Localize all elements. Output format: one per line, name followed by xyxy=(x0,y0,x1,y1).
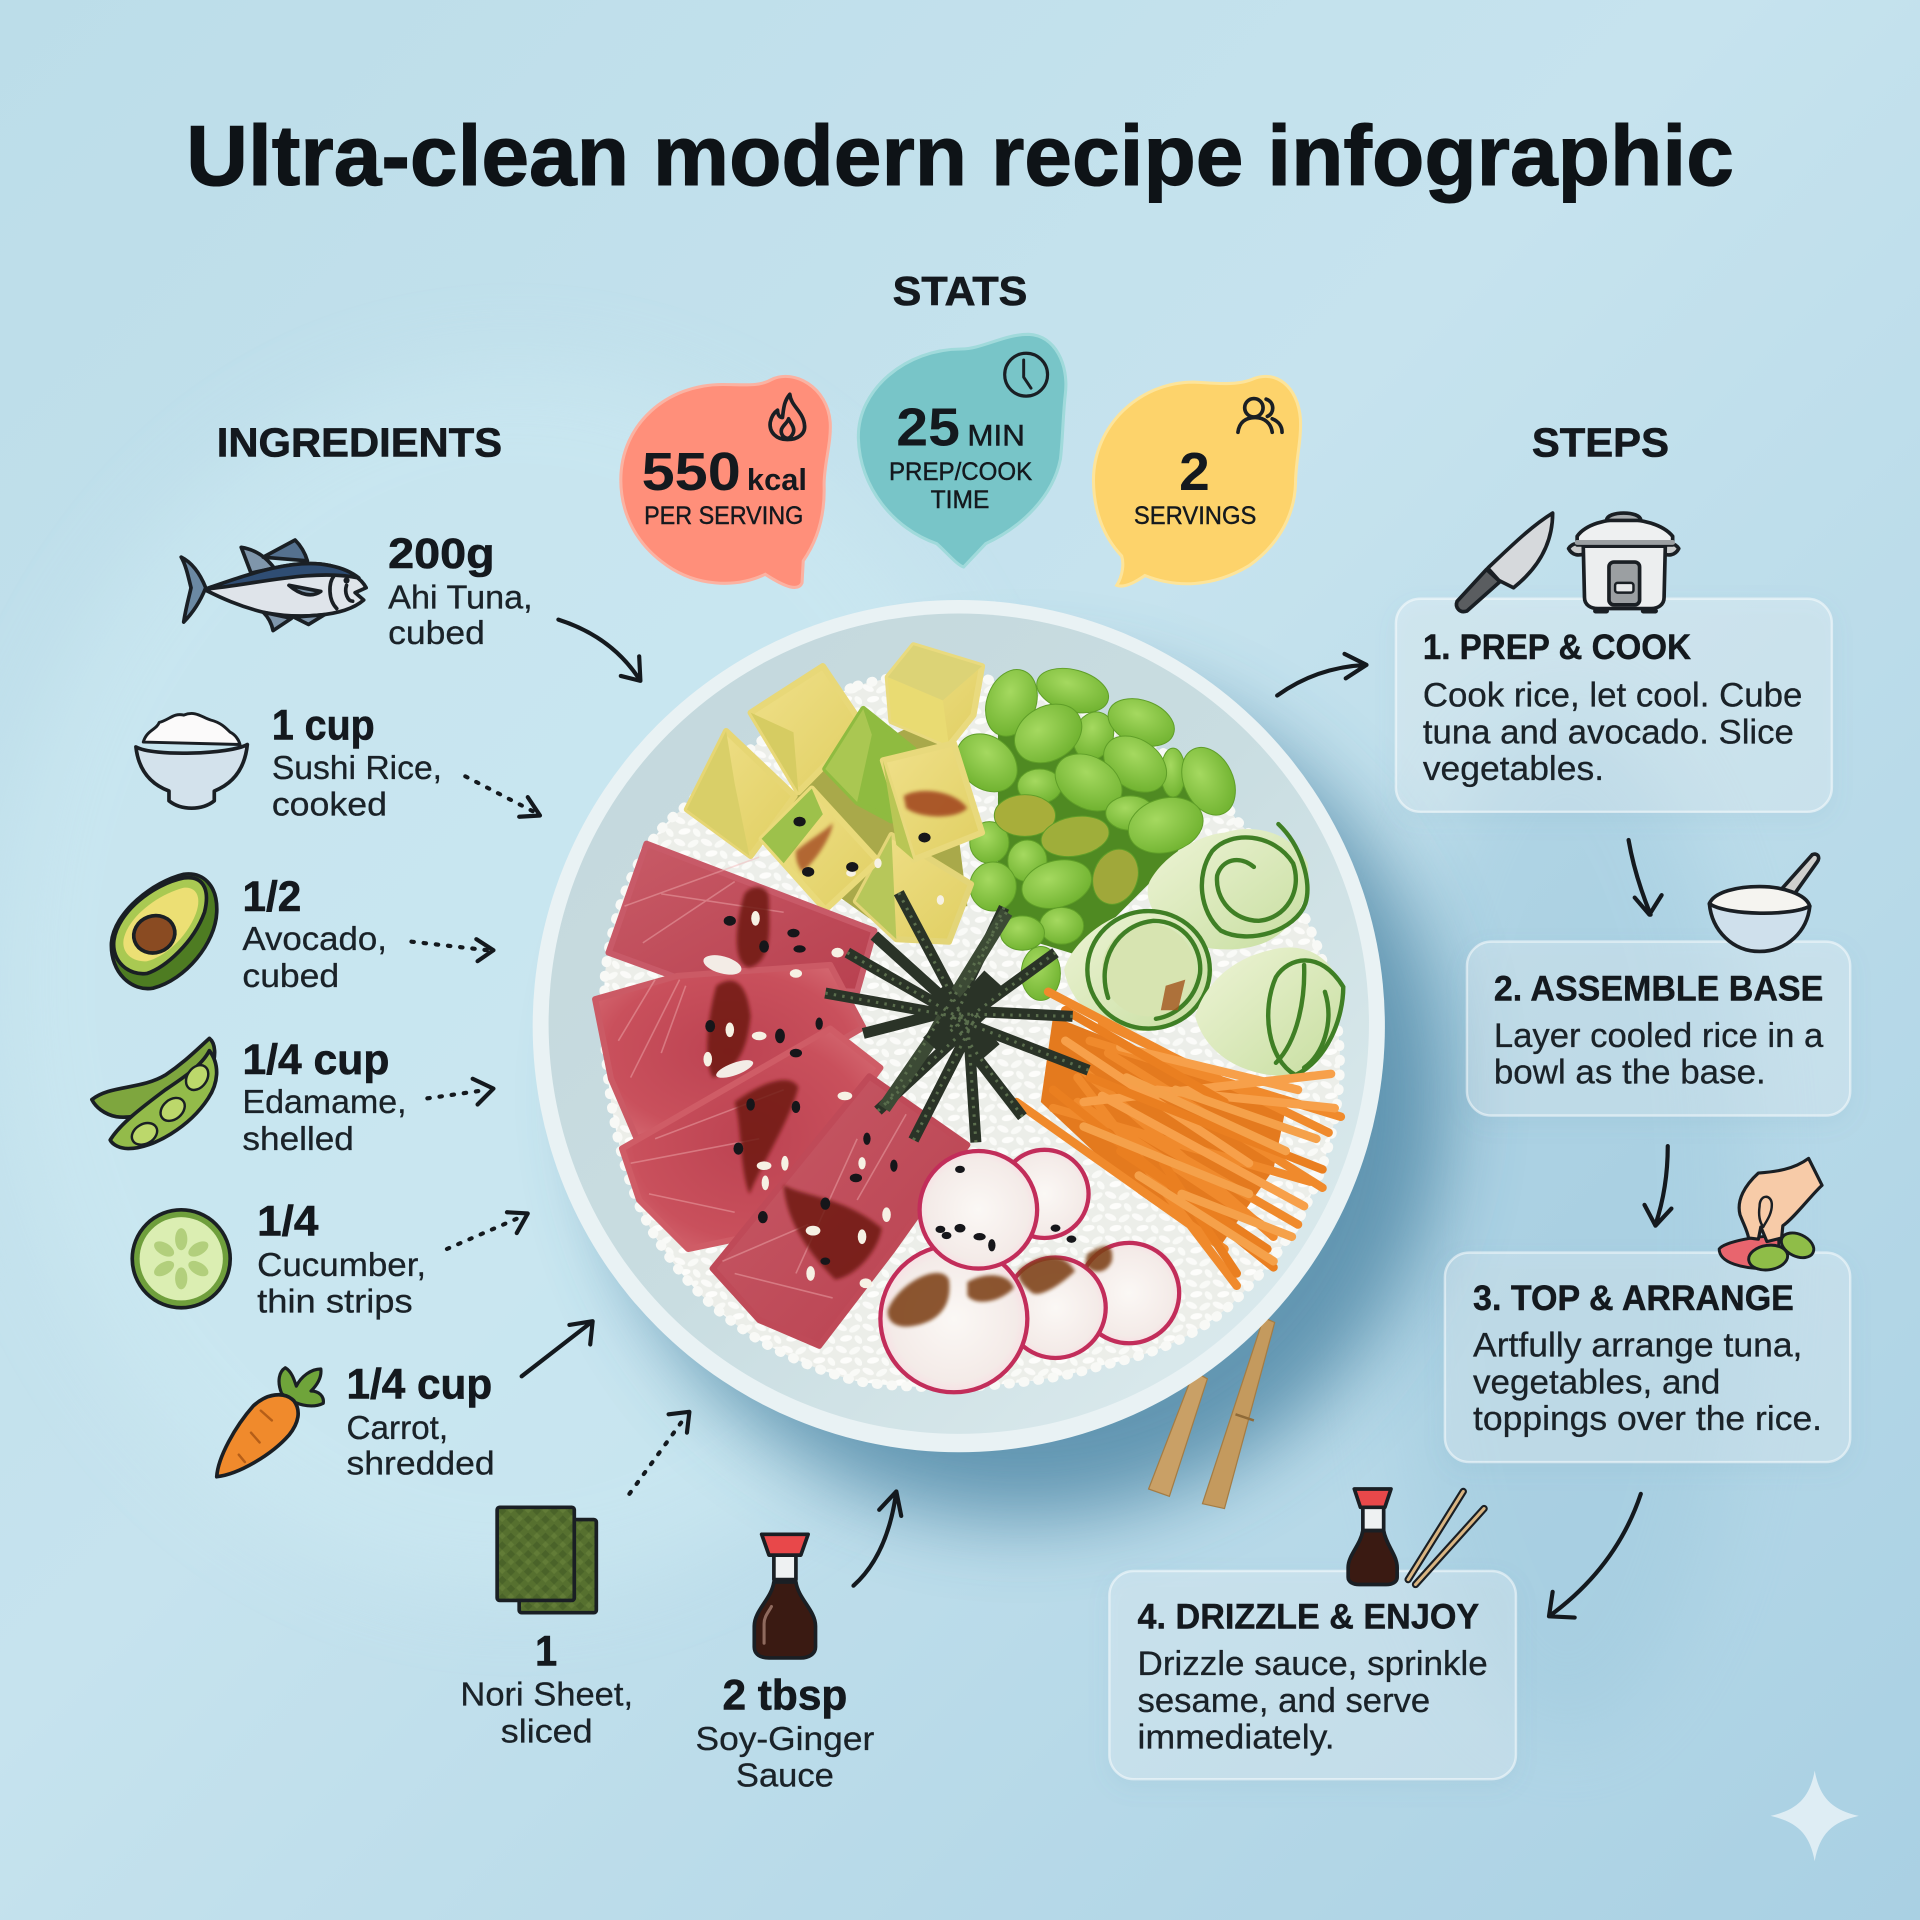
stat: servings: SERVINGS xyxy=(1134,502,1256,530)
radish slices xyxy=(880,1150,1179,1392)
arrow xyxy=(1549,1494,1641,1618)
sauce on avocado xyxy=(904,791,967,816)
icon: mixing bowl xyxy=(1709,854,1819,951)
arrow xyxy=(465,776,540,817)
ingredient: carrot: 1/4 cup xyxy=(347,1360,492,1408)
icon: knife xyxy=(1457,513,1553,612)
ingredient: rice: cooked xyxy=(272,787,387,824)
ingredient: edamame: shelled xyxy=(242,1121,354,1158)
arrow xyxy=(853,1491,901,1586)
arrow xyxy=(427,1079,493,1104)
ingredient: edamame: 1/4 cup xyxy=(242,1036,389,1084)
ingredient: tuna: cubed xyxy=(388,615,485,652)
ingredient: soy sauce xyxy=(696,1534,874,1795)
icon: rice cooker xyxy=(1569,513,1679,611)
arrow xyxy=(629,1412,689,1494)
tuna slices xyxy=(595,817,1057,1346)
icon: clock xyxy=(1005,353,1048,396)
ingredient: tuna: 200g xyxy=(388,530,495,578)
step 3: Artfully arrange tuna, xyxy=(1473,1327,1802,1365)
ingredient: avocado xyxy=(111,873,387,995)
edamame xyxy=(945,661,1246,1000)
stat: servings: 2 xyxy=(1179,442,1210,502)
ingredient: nori xyxy=(460,1507,633,1750)
step 1: vegetables. xyxy=(1423,750,1604,788)
step 1: tuna and avocado. Slice xyxy=(1423,713,1794,751)
ingredient: avocado: Avocado, xyxy=(242,921,387,958)
ingredient: nori: Nori Sheet, xyxy=(460,1677,633,1714)
step 2: Layer cooled rice in a xyxy=(1494,1017,1824,1055)
step 3: 3. TOP & ARRANGE xyxy=(1473,1278,1794,1318)
icon: flame xyxy=(770,394,805,440)
step 4: Drizzle sauce, sprinkle xyxy=(1138,1645,1488,1683)
cucumber rolls xyxy=(1064,824,1343,1076)
stat: time xyxy=(858,334,1066,567)
ingredient: carrot: shredded xyxy=(347,1445,495,1482)
step 4: sesame, and serve xyxy=(1138,1682,1430,1720)
sauce on tuna xyxy=(707,887,882,1280)
arrow xyxy=(1644,1146,1671,1226)
ingredient: cucumber: Cucumber, xyxy=(257,1247,426,1284)
stat: time: PREP/COOK xyxy=(889,458,1032,486)
stat: time: TIME xyxy=(931,486,989,514)
stat: servings xyxy=(1093,376,1301,586)
sauce on radish xyxy=(888,1246,1112,1327)
ingredient: avocado: cubed xyxy=(242,958,339,995)
stat: calories xyxy=(621,376,830,587)
icon: people xyxy=(1238,399,1282,432)
sesame seeds xyxy=(701,858,1057,1288)
icon: rice bowl xyxy=(136,713,247,808)
nori strips xyxy=(825,893,1089,1142)
arrow xyxy=(522,1321,593,1376)
arrow xyxy=(447,1212,528,1249)
ingredient: rice xyxy=(136,702,442,824)
heading: steps: STEPS xyxy=(1532,420,1669,466)
stat: time: 25 xyxy=(896,398,960,458)
icon: avocado xyxy=(111,874,217,989)
ingredient: carrot: Carrot, xyxy=(347,1410,448,1447)
step 1: 1. PREP & COOK xyxy=(1423,627,1691,667)
radish seeds xyxy=(936,1166,1076,1251)
heading: stats: STATS xyxy=(893,268,1027,314)
step 2: bowl as the base. xyxy=(1494,1054,1766,1092)
step 3: vegetables, and xyxy=(1473,1363,1720,1401)
stat: calories: PER SERVING xyxy=(644,502,803,530)
icon: carrot xyxy=(217,1368,323,1477)
ingredient: tuna xyxy=(181,530,533,652)
sparkle xyxy=(1771,1771,1859,1861)
bowl xyxy=(533,600,1385,1452)
icon: soy bottle xyxy=(754,1534,816,1658)
step 4: 4. DRIZZLE & ENJOY xyxy=(1138,1597,1479,1637)
chopsticks xyxy=(1149,1318,1275,1509)
heading: ingredients: INGREDIENTS xyxy=(217,420,502,466)
step 2 xyxy=(1467,854,1850,1116)
stat: calories: kcal xyxy=(747,463,807,497)
arrow xyxy=(558,620,640,681)
arrow xyxy=(411,939,493,961)
arrow xyxy=(1277,654,1367,696)
step 2: 2. ASSEMBLE BASE xyxy=(1494,968,1823,1008)
ingredient: rice: Sushi Rice, xyxy=(272,750,442,787)
step 1 xyxy=(1396,513,1832,812)
icon: cucumber xyxy=(132,1210,230,1308)
icon: tuna xyxy=(181,540,366,631)
step 3: toppings over the rice. xyxy=(1473,1400,1822,1438)
ingredient: nori: sliced xyxy=(501,1713,593,1750)
ingredient: soy sauce: Sauce xyxy=(736,1758,834,1795)
step 4 xyxy=(1109,1489,1516,1779)
ingredient: cucumber: thin strips xyxy=(257,1284,413,1321)
avocado cubes xyxy=(687,645,982,942)
step 1: Cook rice, let cool. Cube xyxy=(1423,677,1802,715)
arrow xyxy=(1629,840,1662,915)
title: Ultra-clean modern recipe infographic xyxy=(186,108,1734,204)
ingredient: carrot xyxy=(217,1360,495,1482)
ingredient: avocado: 1/2 xyxy=(242,873,301,921)
step 4: immediately. xyxy=(1138,1719,1335,1757)
step 3 xyxy=(1445,1158,1850,1462)
ingredient: soy sauce: 2 tbsp xyxy=(722,1671,847,1719)
ingredient: edamame: Edamame, xyxy=(242,1084,407,1121)
icon: nori xyxy=(497,1507,596,1613)
ingredient: cucumber xyxy=(132,1198,426,1321)
ingredient: edamame xyxy=(92,1036,407,1158)
icon: soy bottle and chopsticks xyxy=(1348,1489,1484,1584)
ingredient: tuna: Ahi Tuna, xyxy=(388,580,533,617)
icon: hand arranging xyxy=(1719,1158,1822,1272)
carrots xyxy=(1016,992,1341,1286)
ingredient: rice: 1 cup xyxy=(272,702,375,750)
stat: time: MIN xyxy=(967,420,1025,453)
ingredient: soy sauce: Soy-Ginger xyxy=(696,1721,874,1758)
ingredient: cucumber: 1/4 xyxy=(257,1198,319,1246)
icon: edamame xyxy=(92,1038,217,1149)
ingredient: nori: 1 xyxy=(535,1627,557,1675)
rice base xyxy=(604,674,1340,1387)
bowl shadow xyxy=(600,673,1445,1518)
stat: calories: 550 xyxy=(642,442,741,502)
